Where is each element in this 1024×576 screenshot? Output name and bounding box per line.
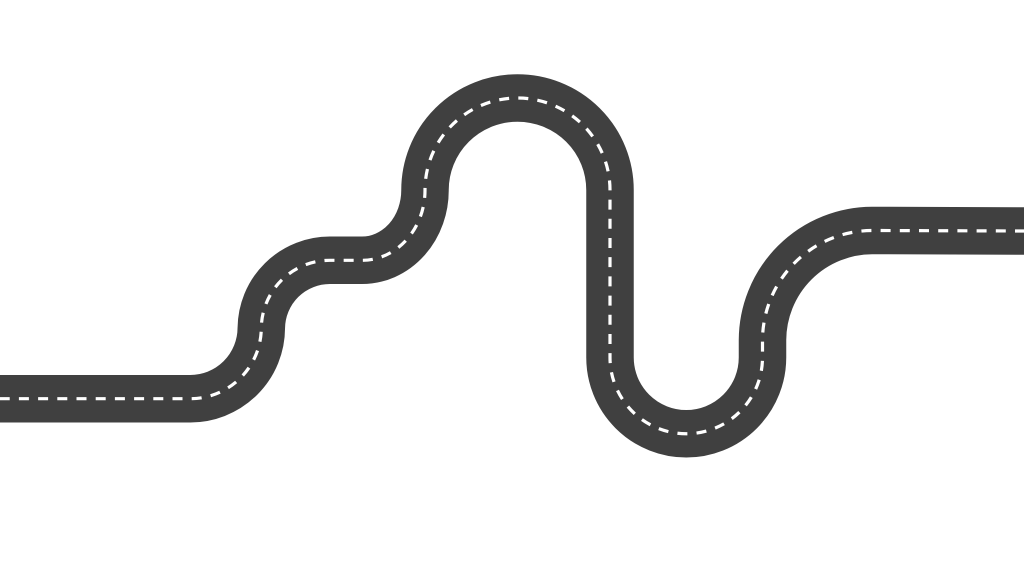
road centre dashed line (0, 98, 1024, 434)
road asphalt (0, 98, 1024, 434)
